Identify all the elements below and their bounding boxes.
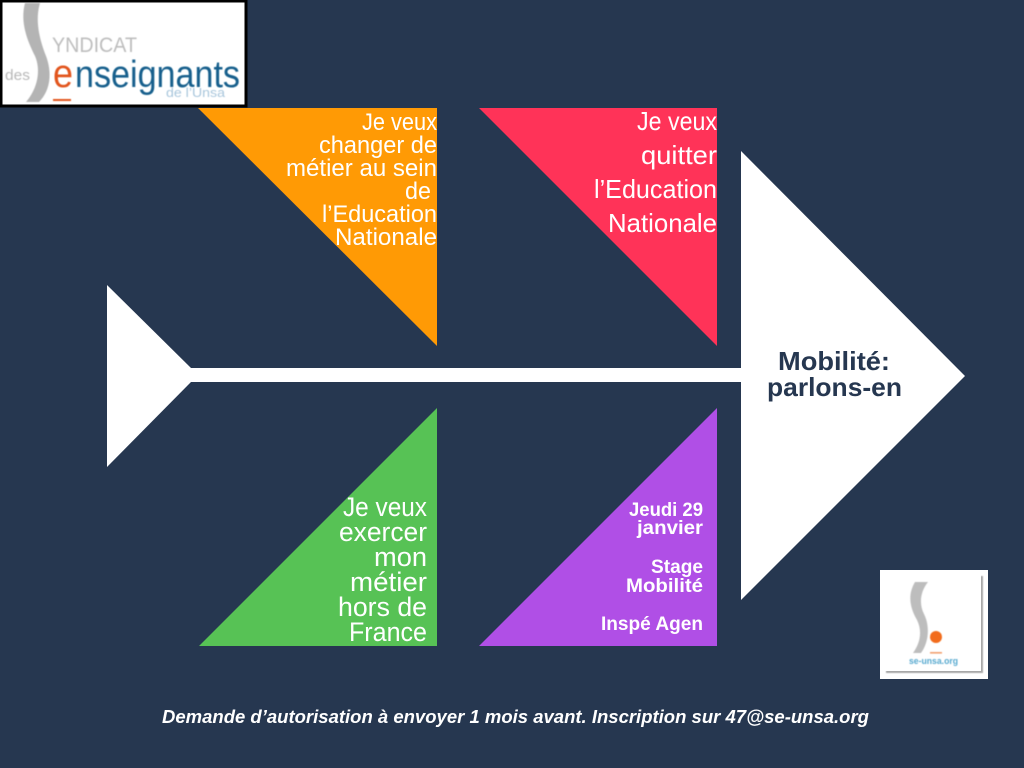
red panel text: l’Education	[594, 174, 717, 204]
purple panel text: Mobilité	[626, 576, 703, 597]
logo: Syndicat des enseignants: des	[5, 67, 30, 84]
orange panel text: changer de	[319, 132, 437, 159]
orange panel text	[286, 109, 437, 251]
logo: se-unsa.org: se-unsa.org	[909, 656, 958, 667]
purple panel text: janvier	[636, 518, 704, 539]
green panel text: métier	[350, 567, 427, 597]
logo: Syndicat des enseignants: e	[53, 52, 73, 96]
purple panel text: Jeudi 29	[629, 500, 703, 521]
red panel text: Je veux	[637, 106, 717, 136]
logo: se-unsa.org	[880, 570, 988, 679]
green panel text	[338, 492, 427, 647]
orange panel text: de	[405, 178, 431, 205]
fish head	[741, 151, 965, 600]
orange panel text: l’Education	[322, 201, 437, 228]
green panel text: Je veux	[343, 492, 427, 522]
main title: parlons-en	[767, 372, 902, 402]
footer note: Demande d’autorisation à envoyer 1 mois avant. Inscription sur 47@se-unsa.org	[162, 706, 869, 727]
green panel text: mon	[374, 542, 427, 572]
red panel text	[594, 106, 717, 238]
purple panel text	[601, 500, 704, 635]
logo: Syndicat des enseignants: de l’Unsa	[166, 85, 226, 100]
fish spine	[190, 368, 742, 382]
purple panel text: Inspé Agen	[601, 614, 703, 635]
red panel text: quitter	[641, 140, 717, 170]
logo: Syndicat des enseignants: YNDICAT	[52, 34, 137, 57]
green panel text: hors de	[338, 592, 427, 622]
fish tail	[107, 285, 191, 467]
main title	[767, 346, 902, 402]
panel: changer de métier	[198, 108, 437, 346]
panel: exercer hors de France	[199, 408, 437, 647]
main title: Mobilité:	[778, 346, 890, 376]
panel: quitter l'Education Nationale	[479, 106, 717, 346]
orange panel text: métier au sein	[286, 155, 437, 182]
purple panel text: Stage	[651, 557, 703, 578]
green panel text: exercer	[339, 517, 427, 547]
orange panel text: Nationale	[335, 224, 437, 251]
orange panel text: Je veux	[362, 109, 437, 136]
red panel text: Nationale	[608, 208, 717, 238]
green panel text: France	[349, 617, 427, 647]
logo: Syndicat des enseignants	[1, 1, 246, 106]
panel: stage mobilité	[479, 408, 717, 646]
logo: Syndicat des enseignants: nseignants	[75, 54, 240, 96]
